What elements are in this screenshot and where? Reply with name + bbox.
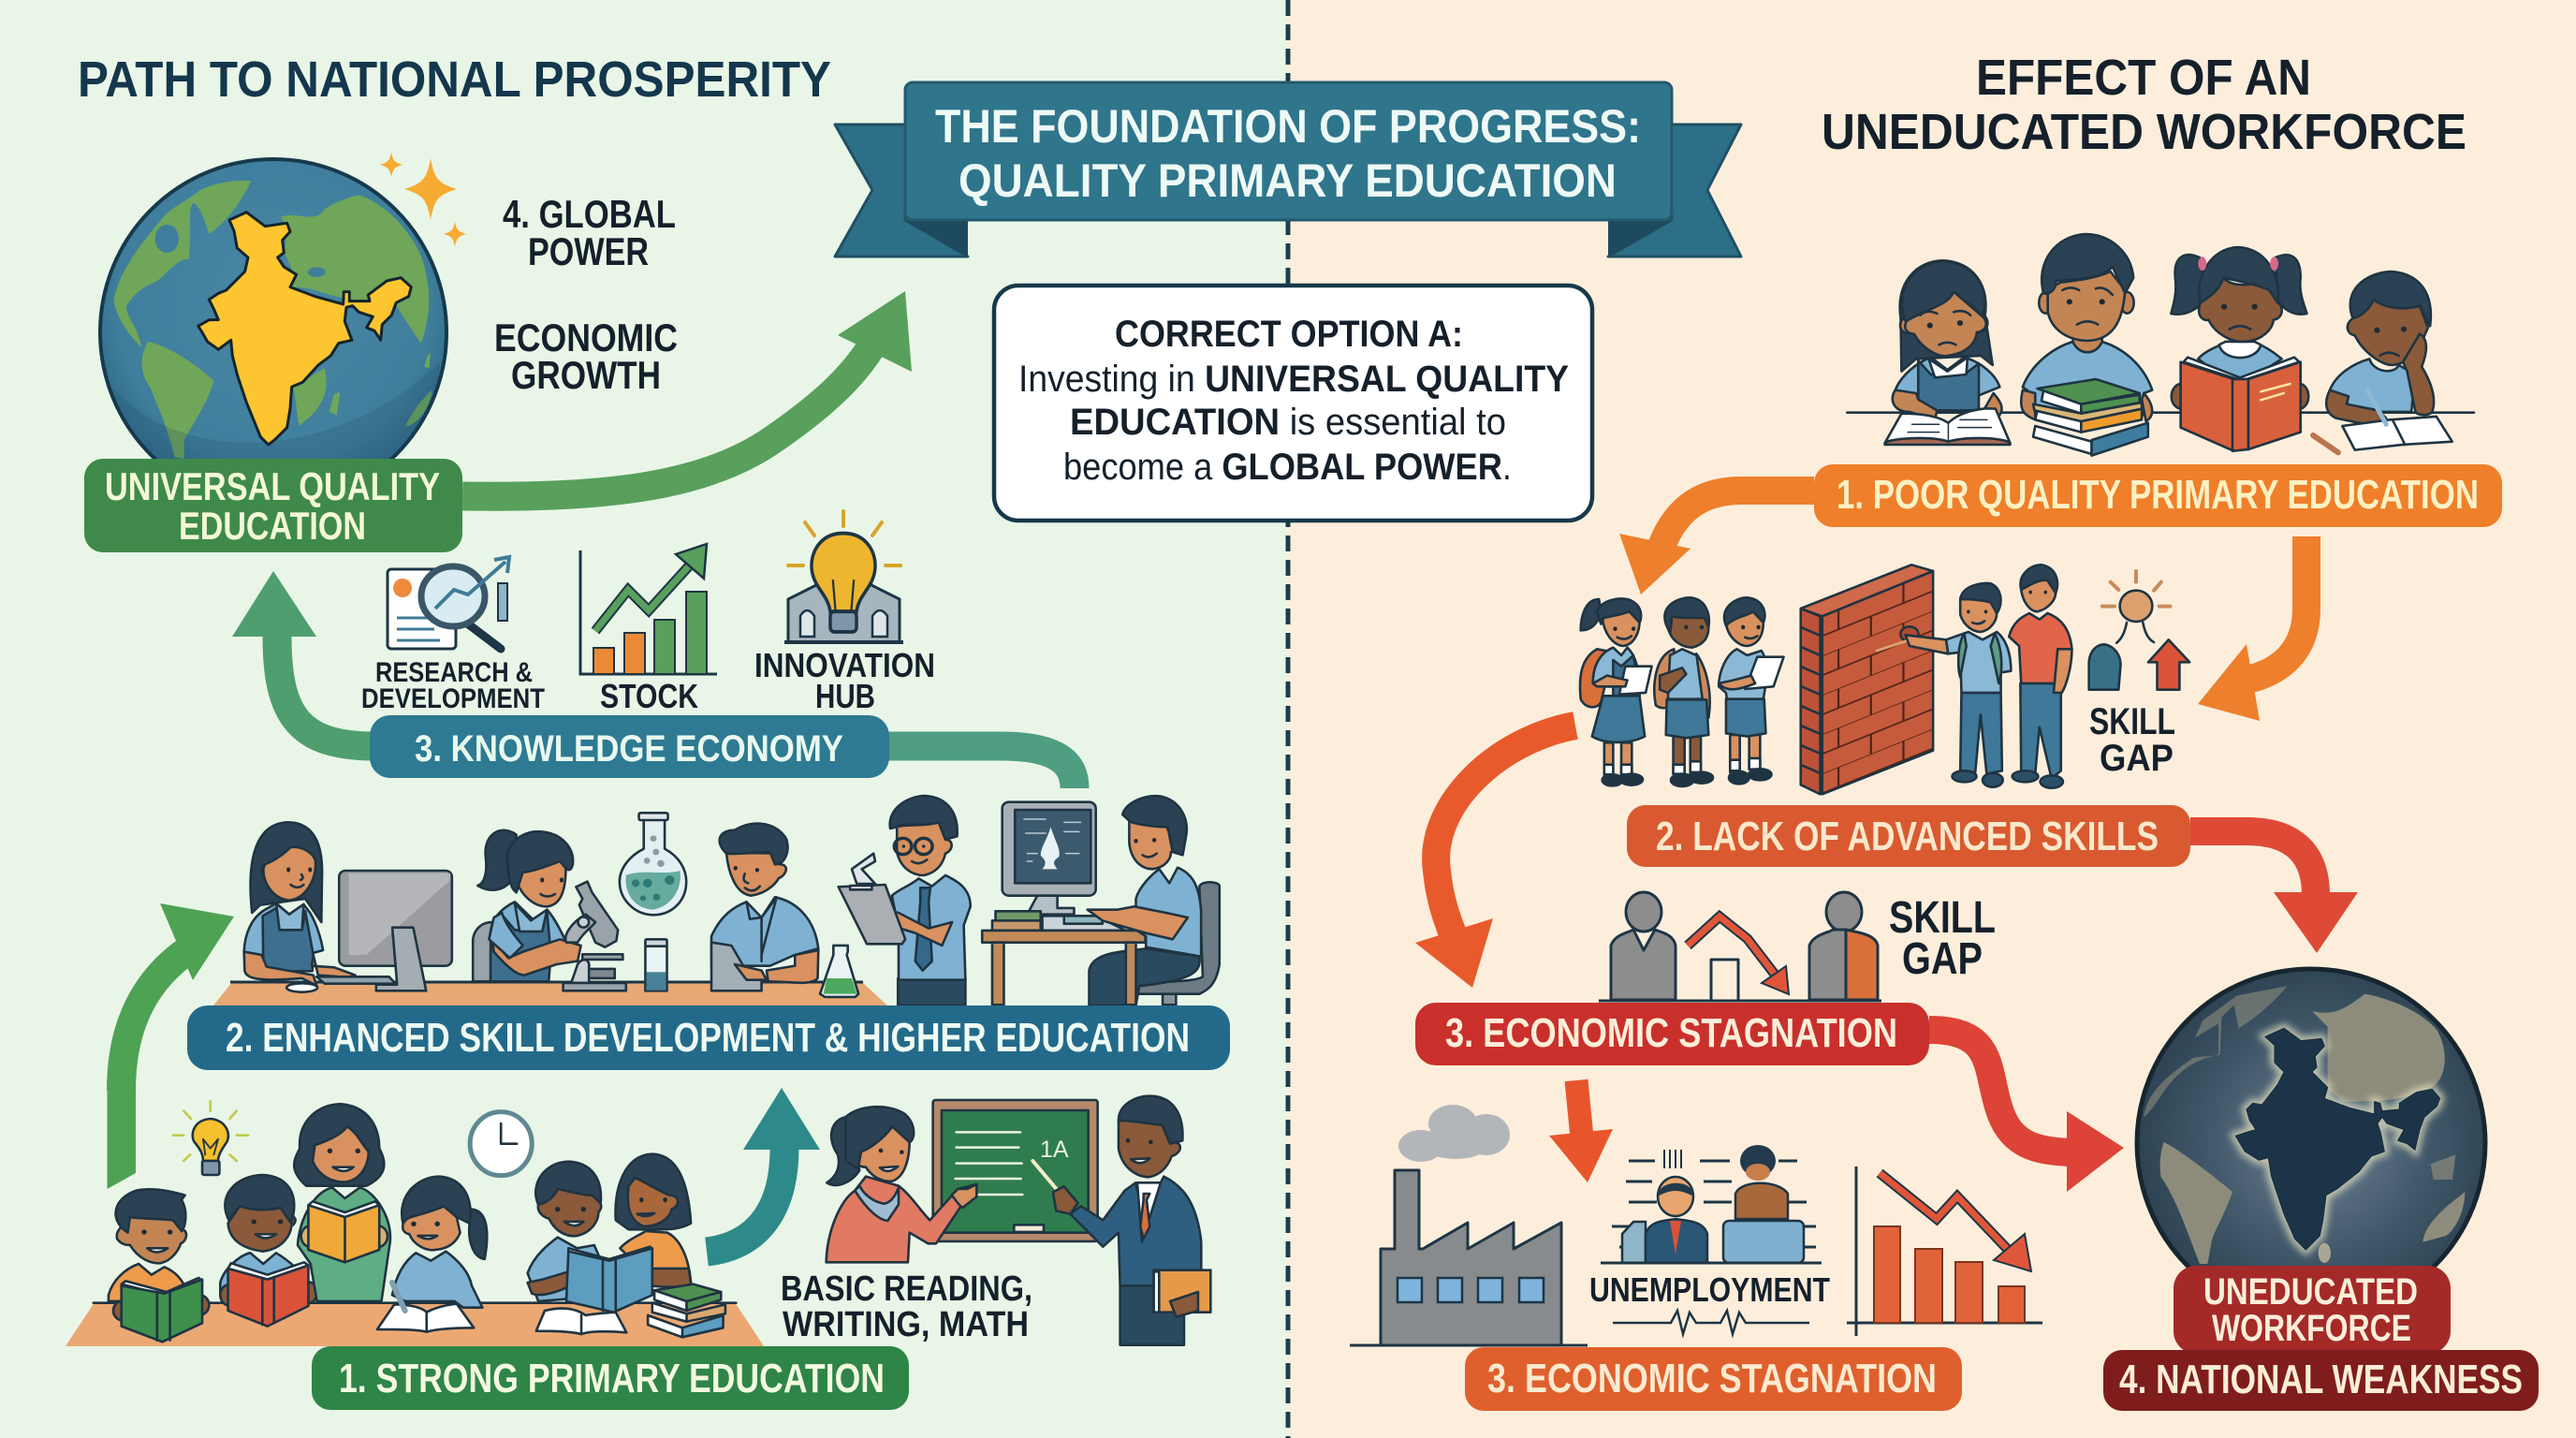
left lab figures (244, 813, 686, 992)
text: innovation hub (754, 646, 935, 715)
woman teacher (827, 1107, 976, 1262)
label: uneducated workforce: WORKFORCE (2212, 1308, 2411, 1349)
text: skill gap large (1889, 893, 1996, 984)
icon: dark globe with India (2134, 966, 2488, 1268)
boy with book stack (2021, 234, 2152, 456)
blackboard (933, 1100, 1098, 1241)
label: universal quality education (84, 459, 462, 552)
arrow: knowledge economy up to universal education (232, 571, 374, 746)
label: strong primary education (312, 1346, 909, 1410)
child with green book (109, 1189, 209, 1342)
arrow: poor education to skill gap (2198, 536, 2306, 721)
title banner: THE FOUNDATION OF PROGRESS: (935, 100, 1641, 153)
right lab figures (711, 796, 1220, 1005)
label: economic stagnation: 3. ECONOMIC STAGNATION (1445, 1010, 1897, 1056)
India map (198, 213, 411, 445)
illustration: primary school children reading (94, 1101, 736, 1342)
arrow: skills into knowledge economy (885, 746, 1075, 788)
label: universal quality education: UNIVERSAL QUALITY (105, 464, 440, 508)
text: research and development: RESEARCH & (375, 657, 533, 688)
heading: effect of an uneducated workforce: UNEDUCATED WORKFORCE (1822, 104, 2466, 160)
text: basic reading, writing, math (781, 1269, 1032, 1344)
India glow (2235, 1028, 2440, 1250)
text: skill gap large: SKILL (1889, 893, 1996, 943)
label: enhanced skill development and higher education: 2. ENHANCED SKILL DEVELOPMENT & HIGHER EDUCATION (226, 1015, 1190, 1061)
icon: stock chart (580, 544, 717, 674)
boy with backpack (1654, 597, 1713, 786)
chart: falling bars (1847, 1167, 2042, 1336)
text: economic growth: ECONOMIC (494, 315, 678, 360)
text: skill gap (2089, 701, 2175, 779)
illustration: teachers at blackboard (827, 1096, 1210, 1345)
text: global power (503, 192, 676, 273)
arrow: basics up to skill development (707, 1088, 820, 1252)
illustration: struggling students (1847, 234, 2474, 456)
illustration: students blocked by brick wall (1580, 565, 2189, 794)
text: research and development: DEVELOPMENT (361, 683, 545, 714)
text: skill gap: GAP (2100, 738, 2174, 779)
heading: effect of an uneducated workforce (1822, 50, 2466, 160)
icon: clock (470, 1112, 532, 1176)
title banner: QUALITY PRIMARY EDUCATION (959, 154, 1617, 207)
label: national weakness (2103, 1350, 2539, 1411)
callout: correct option A: become a GLOBAL POWER. (1063, 447, 1512, 488)
brick wall (1801, 565, 1933, 794)
panel: path to national prosperity background (0, 0, 1288, 1438)
illustration: students and professionals in labs (213, 796, 1220, 1005)
label: lack of advanced skills: 2. LACK OF ADVANCED SKILLS (1656, 814, 2159, 859)
table (213, 982, 887, 1005)
label: lack of advanced skills (1627, 805, 2190, 867)
icon: factory with smoke (1350, 1105, 1588, 1345)
label: poor quality primary education (1814, 464, 2502, 527)
label: enhanced skill development and higher education (187, 1005, 1230, 1070)
arrow: stagnation to unemployment (1549, 1080, 1613, 1182)
callout: correct option A: CORRECT OPTION A: (1115, 314, 1463, 355)
label: universal quality education: EDUCATION (179, 504, 366, 548)
text: skill gap: SKILL (2089, 701, 2175, 742)
text: innovation hub: HUB (815, 677, 875, 715)
text: global power: POWER (528, 229, 649, 273)
label: uneducated workforce (2174, 1266, 2451, 1354)
label: strong primary education: 1. STRONG PRIMARY EDUCATION (339, 1356, 885, 1401)
icon: research and development (388, 557, 509, 649)
label: knowledge economy: 3. KNOWLEDGE ECONOMY (415, 728, 843, 770)
icon: light bulb (173, 1101, 248, 1175)
label: knowledge economy (370, 715, 889, 778)
stacked books (648, 1284, 725, 1337)
girl with orange book (294, 1104, 390, 1301)
icon: innovation hub (784, 511, 903, 642)
icon: sparkles (380, 153, 466, 246)
panel: uneducated workforce background (1288, 0, 2576, 1438)
callout: correct option A (994, 286, 1592, 521)
illustration: teachers at blackboard: 1A (1040, 1137, 1069, 1163)
boy resting head (2313, 271, 2452, 452)
icon: globe with India highlighted (98, 157, 448, 459)
boy with paper (1719, 597, 1784, 784)
pair sharing blue book (528, 1154, 691, 1334)
classroom table (66, 1302, 764, 1346)
girl with red book (2171, 247, 2308, 451)
arrow: primary education up to skills (107, 903, 234, 1189)
label: economic stagnation outcome (1465, 1347, 1962, 1411)
icon: unemployed people (1601, 1145, 1822, 1263)
arrow: students to economic stagnation (1415, 726, 1575, 988)
child with red book (220, 1175, 317, 1327)
text: economic growth: GROWTH (511, 353, 661, 397)
girl writing (1885, 260, 2010, 445)
text: skill gap large: GAP (1902, 934, 1983, 984)
text: basic reading, writing, math: BASIC READING, (781, 1269, 1032, 1309)
label: economic stagnation outcome: 3. ECONOMIC STAGNATION (1487, 1356, 1937, 1401)
text: economic growth (494, 315, 678, 397)
heading: effect of an uneducated workforce: EFFECT OF AN (1976, 50, 2311, 106)
man teacher (1053, 1096, 1210, 1345)
label: uneducated workforce: UNEDUCATED (2203, 1271, 2418, 1313)
arrow: universal education to foundation (462, 291, 912, 496)
text: unemployment: UNEMPLOYMENT (1589, 1270, 1830, 1309)
label: economic stagnation (1415, 1003, 1929, 1065)
text: innovation hub: INNOVATION (754, 646, 935, 684)
icon: skill gap symbol (2089, 571, 2189, 690)
text: stock: STOCK (600, 677, 698, 715)
text: research and development (361, 657, 545, 714)
text: global power: 4. GLOBAL (503, 192, 676, 236)
icon: workers and falling graph (1599, 892, 1881, 1001)
girl writing (377, 1177, 487, 1332)
India map silhouette (2235, 1028, 2440, 1250)
arrow: poor education to students left (1619, 491, 1814, 594)
callout: correct option A: EDUCATION is essential to (1070, 402, 1506, 443)
arrow: stagnation to national weakness (1929, 1030, 2124, 1192)
heading: path to national prosperity: PATH TO NATIONAL PROSPERITY (78, 51, 831, 108)
two men at wall (1877, 565, 2071, 788)
callout: correct option A: Investing in UNIVERSAL QUALITY (1018, 359, 1569, 400)
girl with backpack (1580, 598, 1652, 785)
title banner (835, 82, 1741, 257)
text: basic reading, writing, math: WRITING, MATH (783, 1305, 1029, 1344)
arrow: lack of skills to national weakness (2190, 831, 2358, 953)
